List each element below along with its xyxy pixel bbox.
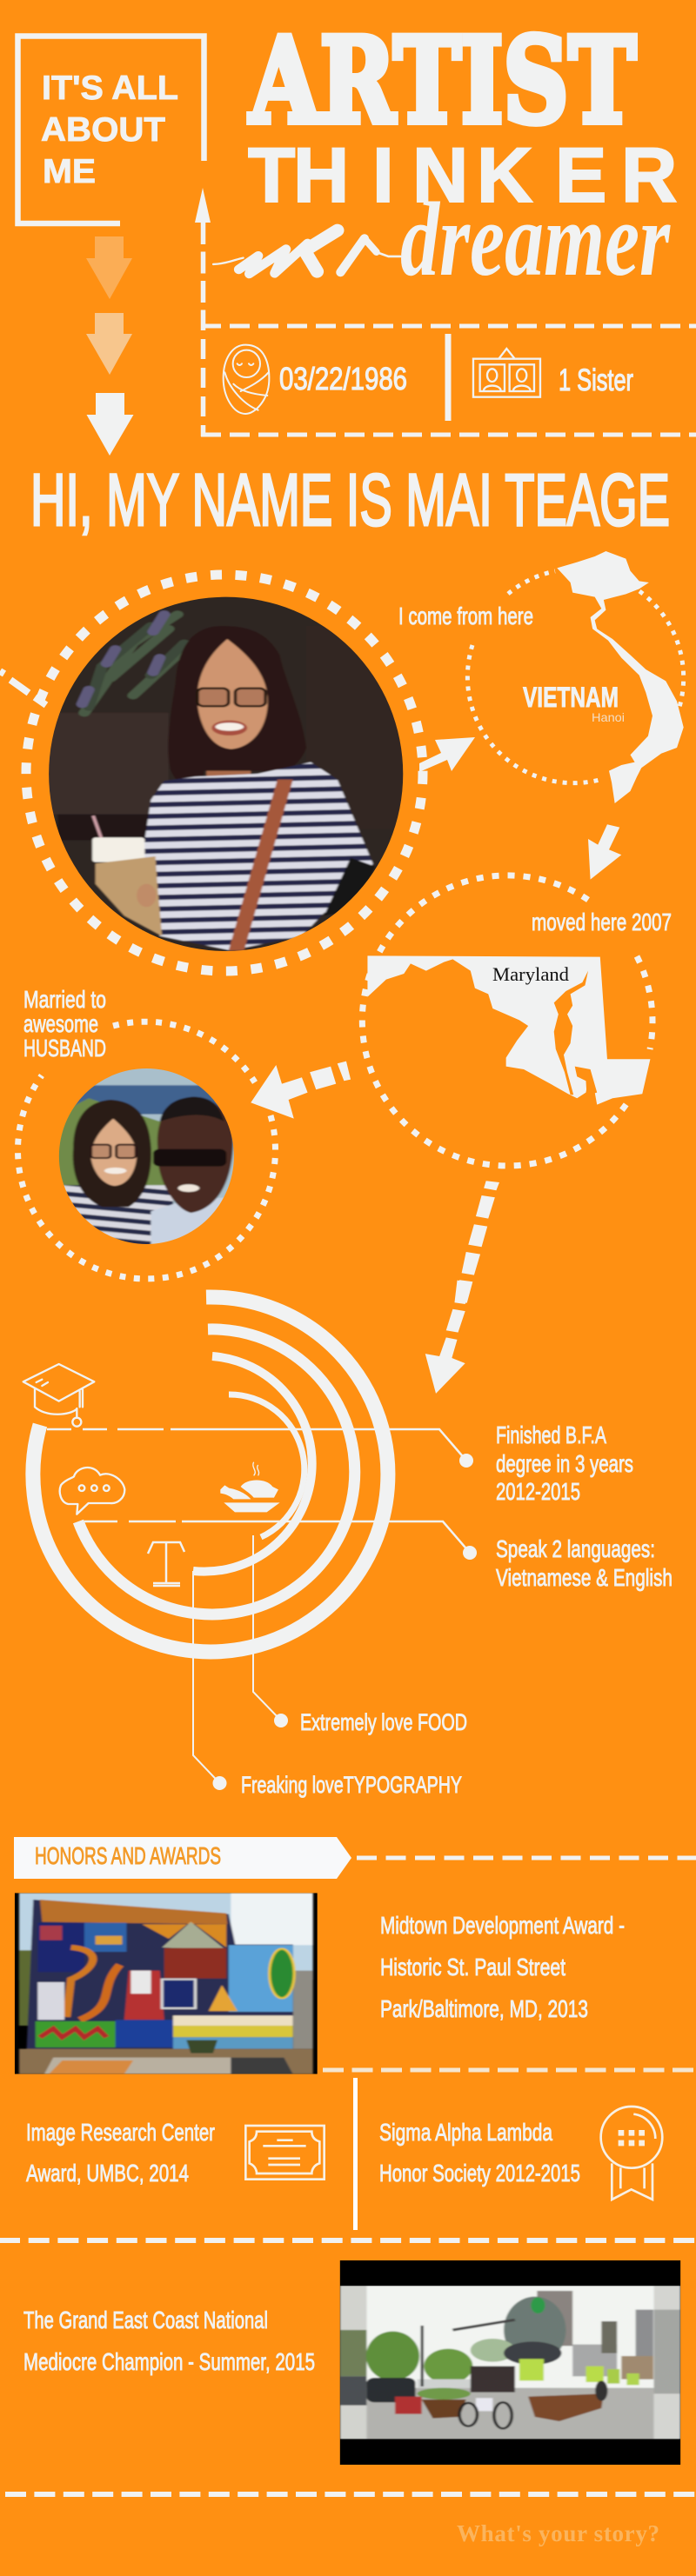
chart: concentric skill arcs <box>23 1297 477 1790</box>
photo: portrait <box>44 594 408 954</box>
text: birth date: 03/22/1986 <box>279 361 407 396</box>
text: it's all about me: IT'S ALL <box>42 70 178 107</box>
arrow: dashed to achievements <box>425 1181 499 1394</box>
arrow: to Maryland <box>588 824 621 880</box>
icon: medal <box>601 2107 662 2200</box>
text: Midtown Development Award: Historic St. Paul Street <box>380 1954 566 1980</box>
text: married to awesome husband: awesome <box>23 1010 98 1037</box>
text: Maryland label: Maryland <box>492 963 569 985</box>
text: Image Research Center award: Award, UMBC, 2014 <box>26 2160 189 2187</box>
map: Maryland <box>367 955 650 1105</box>
panel: Vietnam <box>467 551 684 803</box>
icon: certificate <box>245 2126 325 2180</box>
panel: Maryland <box>362 875 652 1166</box>
text: married to awesome husband <box>23 986 106 1062</box>
text: it's all about me <box>41 70 178 190</box>
text: it's all about me: ABOUT <box>41 111 165 149</box>
banner: honors and awards: HONORS AND AWARDS <box>35 1842 221 1869</box>
text: typography: Freaking loveTYPOGRAPHY <box>241 1772 462 1798</box>
text: finished BFA: 2012-2015 <box>496 1478 580 1505</box>
text: married to awesome husband: Married to <box>23 986 106 1013</box>
decorative dash segment entering from left <box>0 671 46 705</box>
panel: birth date and sister <box>201 326 696 435</box>
text: one sister: 1 Sister <box>559 363 633 397</box>
text: Sigma Alpha Lambda: Sigma Alpha Lambda <box>379 2119 552 2146</box>
text: it's all about me: ME <box>43 153 96 190</box>
title: thinker: THINKER <box>248 131 677 218</box>
panel: portrait photo with dashed ring <box>26 575 423 971</box>
text: Vietnam label: VIETNAM <box>523 682 619 713</box>
arrow: to Vietnam <box>419 737 475 772</box>
photo: mural <box>15 1893 318 2074</box>
text: married to awesome husband: HUSBAND <box>23 1035 106 1062</box>
text: Grand East Coast <box>23 2306 315 2375</box>
text: finished BFA <box>496 1421 633 1505</box>
title: dreamer with squiggle <box>213 181 671 298</box>
text: Hanoi label: Hanoi <box>592 710 625 724</box>
text: Image Research Center award <box>26 2119 215 2187</box>
text: finished BFA: Finished B.F.A <box>496 1421 606 1448</box>
text: food: Extremely love FOOD <box>300 1709 467 1735</box>
text: what's your story: What's your story? <box>457 2520 659 2546</box>
arrow: to husband <box>251 1065 308 1119</box>
icon: family portrait <box>473 349 540 397</box>
arrow: dashed up arrow <box>195 188 211 436</box>
text: Image Research Center award: Image Research Center <box>26 2119 215 2146</box>
icon: graduation cap <box>23 1364 94 1427</box>
icon: typography T <box>148 1542 184 1586</box>
icon: roast chicken <box>220 1462 280 1512</box>
text: Midtown Development Award: Park/Baltimore, MD, 2013 <box>380 1995 588 2022</box>
text: Sigma Alpha Lambda <box>379 2119 580 2187</box>
panel: intro box <box>17 37 204 223</box>
text: Sigma Alpha Lambda: Honor Society 2012-2015 <box>379 2160 580 2187</box>
map: Vietnam <box>557 551 684 803</box>
text: Grand East Coast: Mediocre Champion - Summer, 2015 <box>23 2348 315 2375</box>
text: languages <box>496 1535 673 1591</box>
arrow dashes: to husband <box>310 1062 351 1089</box>
text: Midtown Development Award <box>380 1912 625 2022</box>
icon: speech cloud <box>60 1468 124 1514</box>
banner: honors and awards <box>14 1837 351 1879</box>
icon: swaddled baby <box>224 345 269 414</box>
panel: couple photo with dashed ring <box>17 1022 275 1279</box>
photo: kinetic sculpture race <box>340 2260 680 2465</box>
text: finished BFA: degree in 3 years <box>496 1450 633 1477</box>
text: Grand East Coast: The Grand East Coast National <box>23 2306 268 2333</box>
arrows: three fading down arrows <box>86 236 134 456</box>
text: I come from here: I come from here <box>398 602 533 629</box>
photo: couple <box>53 1067 240 1246</box>
leader lines <box>47 1429 477 1790</box>
